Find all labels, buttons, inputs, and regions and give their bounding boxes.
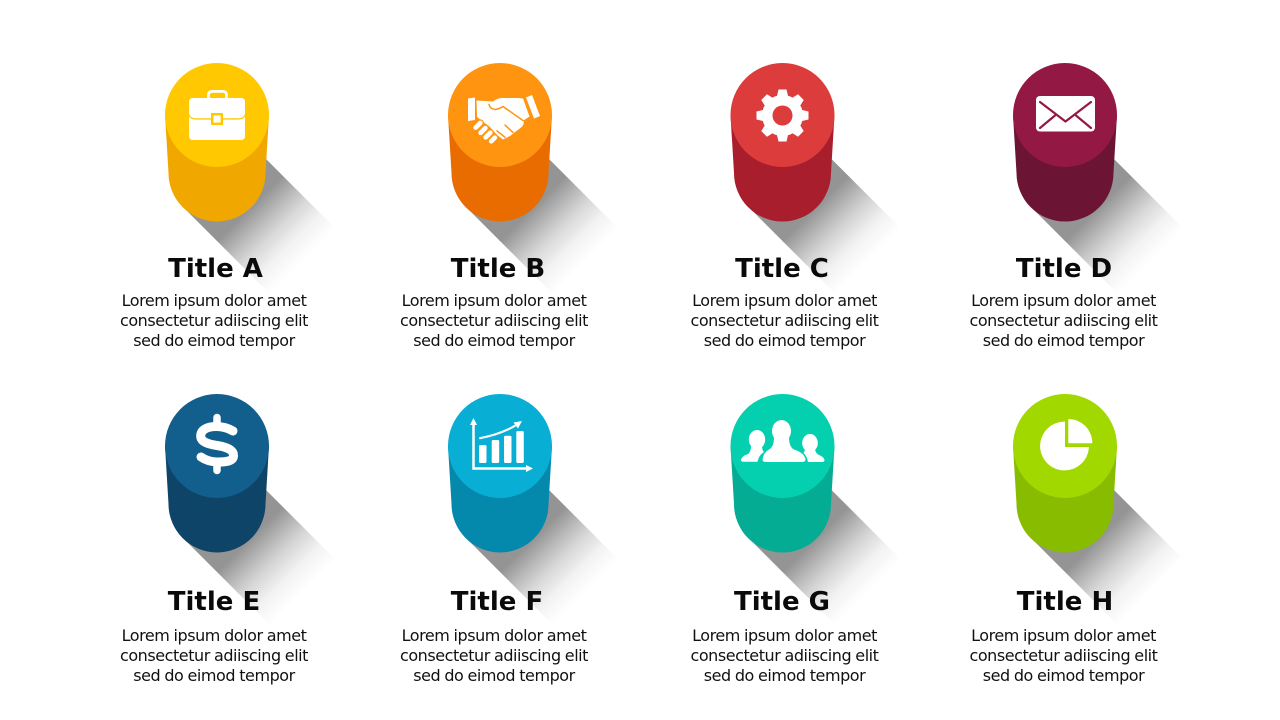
description E: sed do eimod tempor	[133, 666, 296, 685]
description B: Lorem ipsum dolor amet	[402, 291, 587, 310]
icon: rising bar chart	[470, 418, 533, 472]
icon: gear	[756, 90, 808, 142]
cylinder shadow A	[184, 153, 350, 313]
panel: Title E	[120, 394, 350, 685]
description C: sed do eimod tempor	[704, 331, 866, 350]
panel: Title F	[400, 394, 633, 685]
cylinder body E	[165, 446, 269, 552]
cylinder top F	[448, 394, 552, 498]
title F: Title F	[451, 587, 543, 617]
cylinder shadow G	[750, 484, 916, 644]
cylinder body H	[1013, 446, 1117, 552]
cylinder top G	[730, 394, 834, 498]
icon: handshake	[468, 95, 540, 146]
description H: Lorem ipsum dolor amet	[971, 626, 1156, 645]
panel: Title H	[969, 394, 1198, 685]
icon: pie chart	[1040, 419, 1092, 470]
cylinder body D	[1013, 115, 1117, 221]
title C: Title C	[735, 254, 829, 284]
description E: consectetur adiiscing elit	[120, 646, 308, 665]
cylinder shadow C	[750, 153, 916, 313]
description G: Lorem ipsum dolor amet	[692, 626, 877, 645]
cylinder body A	[165, 115, 269, 221]
cylinder top D	[1013, 63, 1117, 167]
cylinder body C	[730, 115, 834, 221]
title B: Title B	[451, 254, 545, 284]
description H: consectetur adiiscing elit	[969, 646, 1158, 665]
panel: Title G	[690, 394, 916, 685]
description D: consectetur adiiscing elit	[969, 311, 1158, 330]
title E: Title E	[168, 587, 260, 617]
description H: sed do eimod tempor	[983, 666, 1145, 685]
panel: Title C	[690, 63, 916, 350]
description A: Lorem ipsum dolor amet	[122, 291, 307, 310]
cylinder body B	[448, 115, 552, 221]
title H: Title H	[1017, 587, 1113, 617]
cylinder shadow D	[1032, 153, 1198, 313]
description D: sed do eimod tempor	[983, 331, 1145, 350]
description C: Lorem ipsum dolor amet	[692, 291, 877, 310]
cylinder top C	[730, 63, 834, 167]
cylinder shadow F	[467, 484, 633, 644]
description G: consectetur adiiscing elit	[690, 646, 879, 665]
icon: briefcase	[189, 91, 245, 140]
panel: Title D	[969, 63, 1198, 350]
description G: sed do eimod tempor	[704, 666, 866, 685]
cylinder top A	[165, 63, 269, 167]
description A: consectetur adiiscing elit	[120, 311, 308, 330]
panel: Title A	[120, 63, 350, 350]
cylinder shadow H	[1032, 484, 1198, 644]
title D: Title D	[1016, 254, 1112, 284]
cylinder top H	[1013, 394, 1117, 498]
cylinder top B	[448, 63, 552, 167]
cylinder body G	[730, 446, 834, 552]
panel: Title B	[400, 63, 633, 350]
description B: consectetur adiiscing elit	[400, 311, 588, 330]
icon: dollar sign	[201, 418, 234, 470]
cylinder top E	[165, 394, 269, 498]
description F: consectetur adiiscing elit	[400, 646, 588, 665]
description F: sed do eimod tempor	[413, 666, 576, 685]
description C: consectetur adiiscing elit	[690, 311, 879, 330]
cylinder shadow B	[467, 153, 633, 313]
icon: envelope	[1036, 96, 1095, 132]
icon: group of people	[741, 420, 824, 462]
description D: Lorem ipsum dolor amet	[971, 291, 1156, 310]
title A: Title A	[168, 254, 263, 284]
cylinder shadow E	[184, 484, 350, 644]
cylinder body F	[448, 446, 552, 552]
title G: Title G	[734, 587, 830, 617]
description B: sed do eimod tempor	[413, 331, 576, 350]
description F: Lorem ipsum dolor amet	[402, 626, 587, 645]
description E: Lorem ipsum dolor amet	[122, 626, 307, 645]
description A: sed do eimod tempor	[133, 331, 296, 350]
